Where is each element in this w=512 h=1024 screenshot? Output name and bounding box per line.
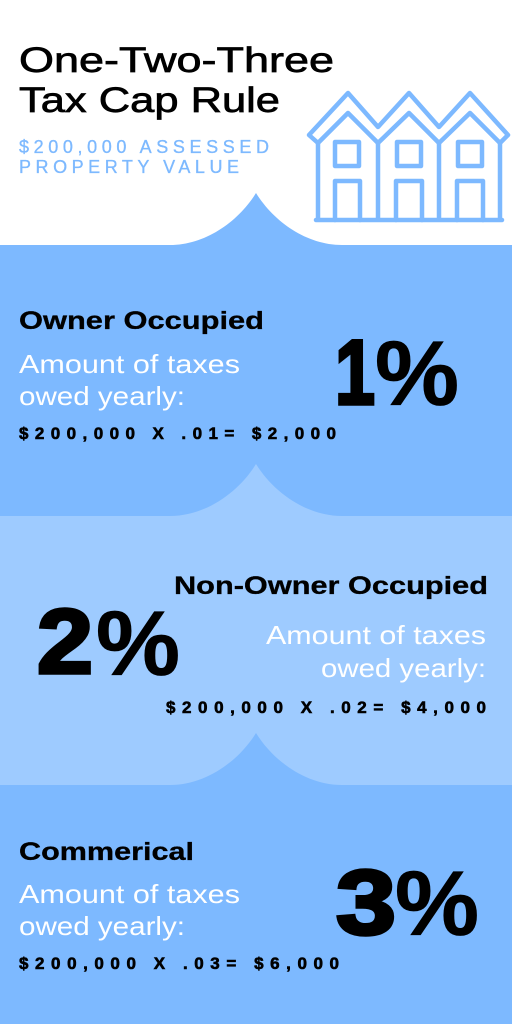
- percent: 2%: 2: [37, 591, 93, 693]
- percent: 1%: %: [375, 323, 459, 425]
- percent: 3%: [336, 852, 479, 955]
- subtitle: PROPERTY VALUE: [19, 157, 239, 177]
- percent: 3%: 3: [336, 852, 396, 954]
- percent: 1%: [335, 322, 459, 425]
- calculation: $200,000 X .01= $2,000: [19, 424, 336, 443]
- subtitle: [19, 137, 269, 177]
- heading: commerical: Commerical: [19, 838, 194, 866]
- percent: 3%: %: [395, 853, 479, 955]
- text: amount owed: [266, 620, 486, 683]
- percent: 2%: %: [96, 593, 180, 695]
- text: amount owed: [19, 879, 240, 941]
- title: Tax Cap Rule: [19, 81, 280, 120]
- panel: commercial: [0, 733, 512, 1024]
- percent: 2%: [37, 591, 180, 695]
- text: amount owed: Amount of taxes: [19, 349, 240, 379]
- panel: owner occupied: [0, 193, 512, 520]
- text: amount owed: [19, 349, 240, 411]
- calculation: $200,000 X .03= $6,000: [19, 954, 339, 973]
- text: amount owed: Amount of taxes: [266, 620, 486, 650]
- text: amount owed: owed yearly:: [19, 381, 185, 411]
- heading: non-owner occupied: Non-Owner Occupied: [174, 572, 488, 600]
- title: [19, 41, 334, 120]
- calculation: $200,000 X .02= $4,000: [166, 698, 486, 717]
- subtitle: $200,000 ASSESSED: [19, 137, 269, 157]
- text: amount owed: owed yearly:: [321, 653, 486, 683]
- text: amount owed: Amount of taxes: [19, 879, 240, 909]
- heading: owner occupied: Owner Occupied: [19, 307, 264, 335]
- panel: non-owner occupied: [0, 464, 512, 790]
- text: amount owed: owed yearly:: [19, 911, 185, 941]
- icon: row houses: [309, 93, 508, 220]
- title: One-Two-Three: [19, 41, 334, 80]
- percent: 1%: 1: [335, 322, 375, 424]
